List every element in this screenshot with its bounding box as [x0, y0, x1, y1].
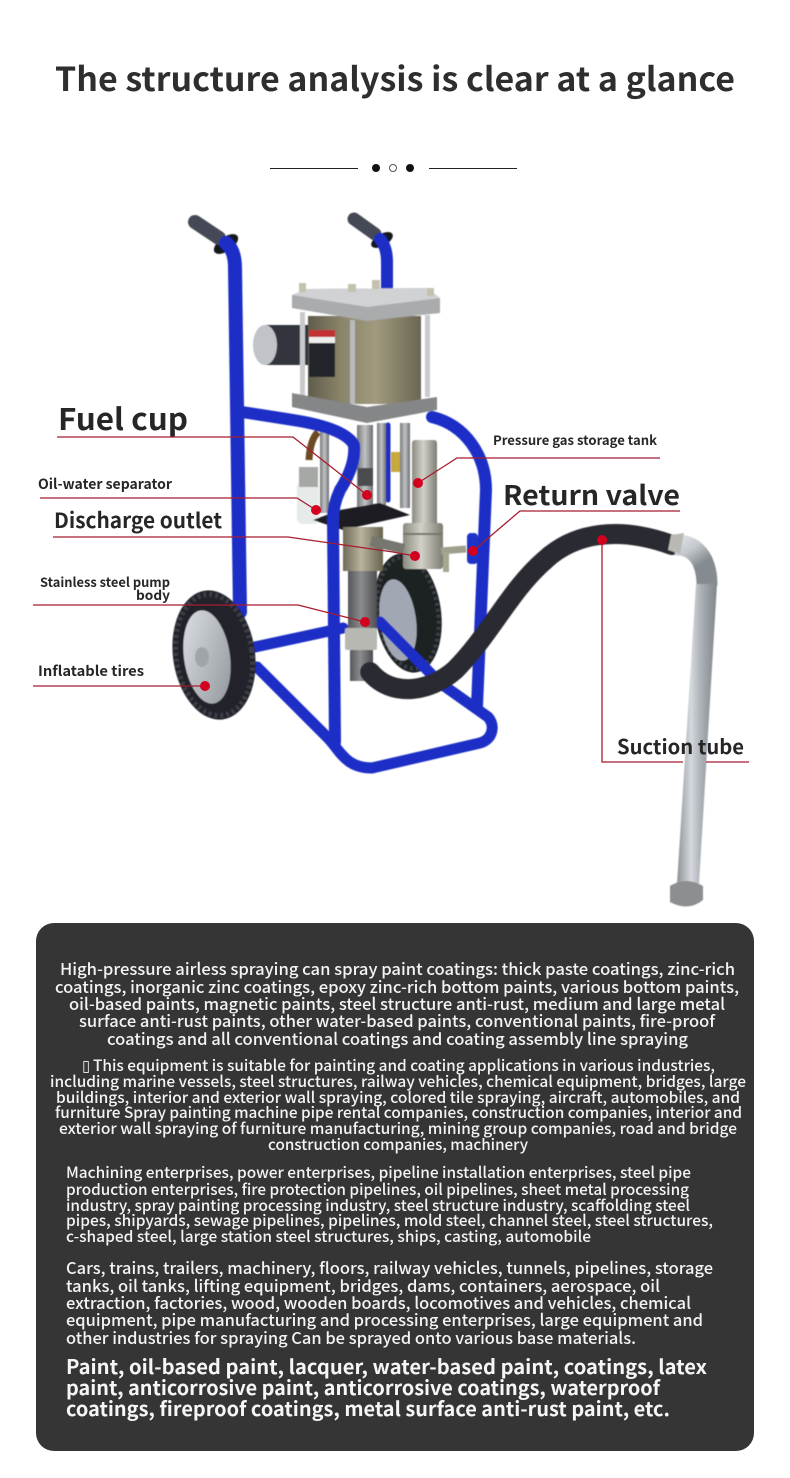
callout: oil-water separator: Oil-water separator	[38, 474, 173, 494]
text block: vehicles and base materials: tanks, oil tanks, lifting equipment, bridges, dams, containers, aerospace, oil	[66, 1273, 660, 1297]
top plate	[292, 280, 440, 321]
panel: applications	[36, 923, 754, 1451]
text block: vehicles and base materials: other industries for spraying Can be sprayed onto various base materials.	[66, 1325, 636, 1349]
storage tank	[403, 440, 443, 569]
callout: discharge outlet	[53, 505, 420, 561]
callout: suction tube	[597, 535, 749, 762]
callout: pressure gas storage tank	[413, 430, 660, 488]
text block: paint coatings: oil-based paints, magnetic paints, steel structure anti-rust, medium and large metal	[69, 991, 725, 1015]
text block: paint coatings: High-pressure airless spraying can spray paint coatings: thick paste coatings, zinc-rich	[60, 956, 735, 980]
metal suction tube	[668, 533, 717, 907]
callout: inflatable tires: Inflatable tires	[38, 661, 144, 681]
text block: paint types	[66, 1351, 707, 1422]
bottom plate	[292, 393, 437, 423]
text block: paint coatings: coatings, inorganic zinc coatings, epoxy zinc-rich bottom paints, various bottom paints,	[55, 974, 739, 998]
text block: paint types: coatings, fireproof coatings, metal surface anti-rust paint, etc.	[66, 1393, 670, 1422]
text block: industries	[50, 1054, 746, 1155]
callout: pressure gas storage tank: Pressure gas storage tank	[493, 430, 657, 449]
return valve	[467, 533, 478, 564]
text block: enterprises: Machining enterprises, power enterprises, pipeline installation enterprises, steel pipe	[66, 1161, 691, 1183]
callout: inflatable tires	[33, 661, 210, 691]
mounting plate	[313, 503, 410, 530]
text block: vehicles and base materials	[66, 1255, 713, 1349]
rubber hose	[370, 534, 672, 689]
text block: vehicles and base materials: extraction, factories, wood, wooden boards, locomotives and vehicles, chemical	[66, 1290, 691, 1314]
callout: return valve	[468, 474, 680, 556]
air cylinder	[300, 312, 430, 404]
text block: paint coatings: coatings and all conventional coatings and coating assembly line spraying	[107, 1026, 689, 1050]
text block: paint coatings: surface anti-rust paints, other water-based paints, conventional paints, fire-proof	[79, 1008, 716, 1032]
front left wheel	[164, 585, 264, 725]
text block: industries: furniture Spray painting machine pipe rental companies, construction companies, interior and	[55, 1101, 742, 1123]
text block: enterprises	[66, 1161, 713, 1247]
callout: oil-water separator	[38, 474, 321, 515]
text block: enterprises: industry, spray painting processing industry, steel structure industry, scaffolding steel	[66, 1194, 690, 1216]
text block: vehicles and base materials: Cars, trains, trailers, machinery, floors, railway vehicles, tunnels, pipelines, storage	[66, 1255, 713, 1279]
fuel cup	[297, 467, 319, 524]
text block: enterprises: pipes, shipyards, sewage pipelines, pipelines, mold steel, channel steel, steel structures,	[66, 1209, 713, 1231]
text block: industries: including marine vessels, steel structures, railway vehicles, chemical equipment, bridges, large	[50, 1070, 746, 1092]
callout: suction tube: Suction tube	[617, 731, 744, 760]
text block: paint types: Paint, oil-based paint, lacquer, water-based paint, coatings, latex	[66, 1351, 707, 1380]
illustration: airless spray machine	[164, 219, 717, 907]
text block: enterprises: production enterprises, fire protection pipelines, oil pipelines, sheet metal processing	[66, 1178, 689, 1200]
front frame upright over the pump	[242, 412, 354, 742]
tie rods and hoses	[309, 423, 410, 513]
callout: return valve: Return valve	[503, 474, 680, 513]
cart frame	[226, 239, 492, 768]
callout: stainless steel pump body	[33, 572, 370, 627]
text block: industries: ▯	[82, 1054, 90, 1076]
callout: stainless steel pump body: body	[136, 585, 171, 604]
handles	[195, 219, 395, 258]
pump body	[343, 527, 383, 681]
text block: paint coatings	[55, 956, 739, 1050]
text block: industries: This equipment is suitable for painting and coating applications in various industries,	[93, 1054, 715, 1076]
callout: fuel cup: Fuel cup	[58, 395, 188, 439]
callout: fuel cup	[57, 395, 372, 500]
text block: industries: buildings, interior and exterior wall spraying, colored tile spraying, aircraft, automobiles, and	[56, 1086, 740, 1108]
text block: vehicles and base materials: equipment, pipe manufacturing and processing enterprises, large equipment and	[66, 1307, 703, 1331]
text block: industries: construction companies, machinery	[268, 1133, 529, 1155]
text block: industries: exterior wall spraying of furniture manufacturing, mining group companies, road and bridge	[59, 1117, 737, 1139]
title: The structure analysis is clear at a glance	[55, 53, 735, 101]
fittings	[371, 541, 466, 572]
callout: discharge outlet: Discharge outlet	[54, 505, 222, 535]
callout: stainless steel pump body: Stainless steel pump	[40, 572, 170, 591]
rear right wheel	[367, 549, 449, 677]
text block: enterprises: c-shaped steel, large station steel structures, ships, casting, automobile	[66, 1225, 591, 1247]
divider with three dots	[270, 164, 517, 172]
text block: paint types: paint, anticorrosive paint, anticorrosive coatings, waterproof	[66, 1372, 662, 1401]
motor	[253, 325, 311, 365]
